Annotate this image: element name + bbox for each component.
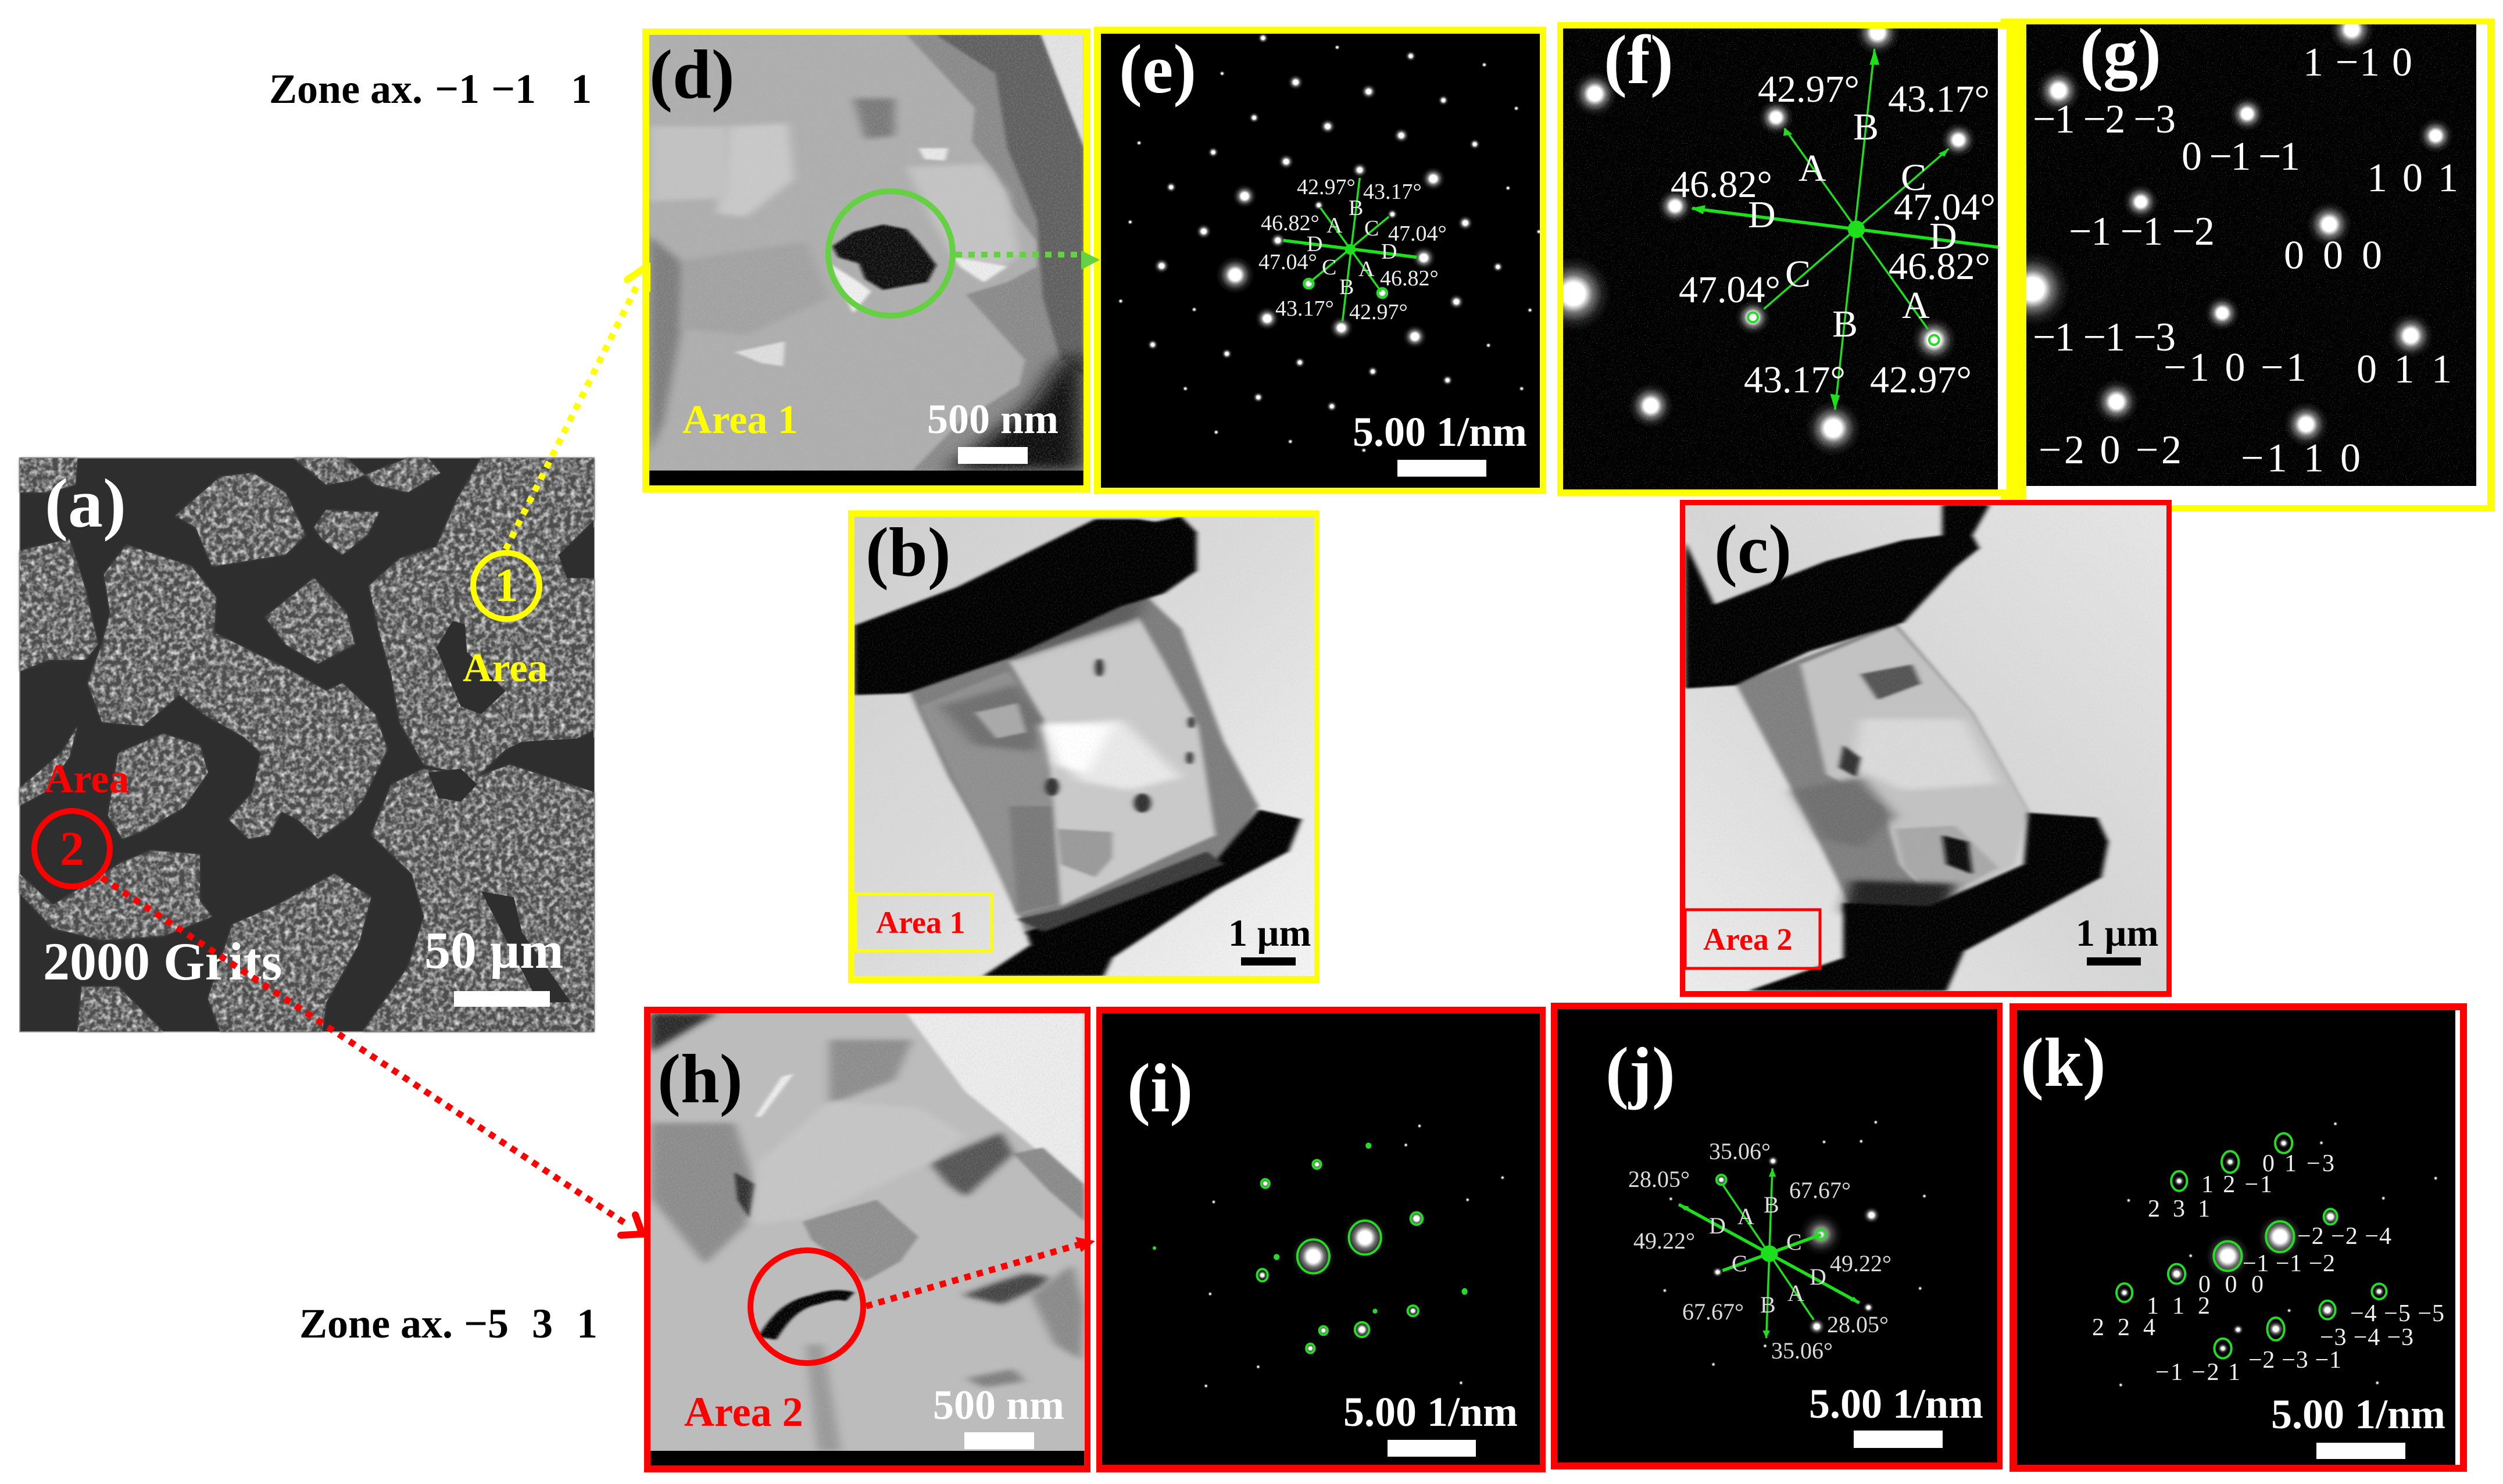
angle values: 46.82° bbox=[1261, 211, 1320, 235]
marker circle 2 bbox=[34, 811, 110, 886]
zone axis label: area 1: −1 bbox=[435, 66, 480, 112]
marker circle 2: 2 bbox=[60, 822, 84, 876]
scale bar bbox=[454, 991, 550, 1007]
Area label red: Area bbox=[44, 757, 129, 802]
angle values: 67.67° bbox=[1682, 1299, 1744, 1325]
label (b): (b) bbox=[866, 513, 951, 591]
Miller indices: −2 0 −2 bbox=[2039, 428, 2182, 473]
scale bar bbox=[2087, 957, 2141, 966]
direction letters: B bbox=[1760, 1292, 1776, 1318]
angle values: 46.82° bbox=[1671, 163, 1772, 206]
Miller indices: 2 2 4 bbox=[2092, 1314, 2155, 1341]
scale label: 5.00 1/nm bbox=[2271, 1391, 2445, 1437]
direction letters: B bbox=[1349, 196, 1363, 220]
zone axis label: area 2: 1 bbox=[577, 1300, 598, 1347]
Miller indices: −2 −3 −1 bbox=[2248, 1347, 2341, 1374]
diffraction spots bbox=[1118, 33, 1542, 453]
marker circle 1: 1 bbox=[494, 559, 519, 612]
panel d: TEM image area 1 bbox=[642, 28, 1090, 492]
scale bar bbox=[958, 447, 1028, 464]
green direction lines bbox=[1283, 178, 1417, 321]
Area 1 boxed label: Area 1 bbox=[876, 905, 965, 940]
diffraction spots and green rings bbox=[1153, 1124, 1505, 1389]
direction letters: D bbox=[1381, 239, 1397, 264]
scale label 50 µm: 50 µm bbox=[424, 922, 563, 979]
angle values: 28.05° bbox=[1628, 1166, 1690, 1192]
Area label yellow: Area bbox=[463, 646, 548, 691]
direction letters: C bbox=[1786, 1229, 1802, 1255]
zone axis label: area 2: 3 bbox=[532, 1300, 553, 1347]
angle values: 42.97° bbox=[1349, 300, 1408, 324]
label (j): (j) bbox=[1606, 1033, 1675, 1110]
label (c): (c) bbox=[1714, 510, 1792, 588]
scale label: 1 µm bbox=[2076, 912, 2159, 954]
marker circle 1 bbox=[473, 553, 539, 619]
direction letters: A bbox=[1737, 1203, 1754, 1229]
diffraction spots bbox=[1662, 1120, 1927, 1367]
arrow: green dotted from panel d to panel e bbox=[956, 251, 1100, 270]
angle values: 43.17° bbox=[1744, 359, 1846, 401]
direction letters: C bbox=[1364, 216, 1379, 241]
direction letters: A bbox=[1787, 1280, 1804, 1306]
angle values: 46.82° bbox=[1889, 245, 1990, 288]
green selected area circle bbox=[828, 191, 953, 316]
angle values: 43.17° bbox=[1275, 296, 1334, 321]
Miller indices: 0 −1 −1 bbox=[2182, 134, 2300, 179]
direction letters: A bbox=[1326, 213, 1343, 238]
green direction arrows bbox=[1679, 1168, 1860, 1338]
zone axis label: area 1: 1 bbox=[571, 66, 592, 112]
Area 2 label: Area 2 bbox=[684, 1389, 803, 1435]
scale label: 1 µm bbox=[1228, 912, 1311, 954]
Miller indices: −1 −2 −3 bbox=[2033, 97, 2176, 142]
angle values: 35.06° bbox=[1709, 1138, 1771, 1164]
angle values: 47.04° bbox=[1679, 269, 1780, 311]
angle values: 35.06° bbox=[1771, 1338, 1833, 1364]
panel k: indexed diffraction pattern with rings bbox=[2009, 1003, 2467, 1472]
green direction arrows bbox=[1691, 49, 2002, 410]
direction letters: A bbox=[1902, 284, 1930, 327]
Miller indices bbox=[2033, 40, 2458, 481]
scale bar bbox=[1388, 1440, 1476, 1457]
angle values: 28.05° bbox=[1827, 1311, 1889, 1338]
angle values: 67.67° bbox=[1789, 1177, 1851, 1203]
Miller indices: −1 −1 −3 bbox=[2033, 315, 2176, 360]
panel g: indexed diffraction pattern bbox=[1995, 7, 2495, 512]
scale label 500 nm: 500 nm bbox=[933, 1382, 1064, 1428]
panel f: magnified diffraction pattern with angles bbox=[1557, 22, 2007, 496]
direction letters: A bbox=[1358, 257, 1375, 281]
angle values: 42.97° bbox=[1297, 175, 1356, 199]
scale bar bbox=[1397, 460, 1486, 477]
direction letters: C bbox=[1785, 253, 1811, 295]
label (d): (d) bbox=[649, 35, 735, 113]
direction letters: B bbox=[1339, 275, 1354, 299]
arrow: red dotted from panel h to panel i bbox=[866, 1237, 1095, 1306]
arrow: yellow dotted from area 1 to panel d bbox=[506, 263, 646, 549]
label (f): (f) bbox=[1604, 21, 1674, 98]
angle values bbox=[1628, 1138, 1891, 1364]
Miller indices: 1 −1 0 bbox=[2303, 40, 2412, 85]
zone axis label: area 2: −5 bbox=[464, 1300, 509, 1347]
angle values: 43.17° bbox=[1363, 180, 1422, 204]
direction letters: A bbox=[1798, 147, 1826, 189]
scale label: 5.00 1/nm bbox=[1809, 1381, 1983, 1427]
Miller indices: −1 1 0 bbox=[2241, 436, 2361, 481]
direction letters: D bbox=[1709, 1213, 1726, 1239]
Miller indices bbox=[2092, 1150, 2444, 1386]
direction letters: D bbox=[1307, 232, 1322, 256]
diffraction spots bbox=[1536, 10, 1998, 489]
angle values: 42.97° bbox=[1758, 68, 1860, 110]
angle values: 47.04° bbox=[1388, 221, 1447, 246]
Miller indices: 0 1 1 bbox=[2357, 347, 2452, 392]
Miller indices: 0 0 0 bbox=[2198, 1271, 2264, 1298]
diffraction spots bbox=[1995, 7, 2476, 486]
direction letters: D bbox=[1929, 215, 1957, 258]
Area 2 boxed label bbox=[1685, 910, 1820, 968]
panel a: SEM micrograph bbox=[20, 458, 594, 1032]
Miller indices: −3 −4 −3 bbox=[2320, 1324, 2413, 1351]
label (k): (k) bbox=[2021, 1024, 2106, 1101]
Area 1 label: Area 1 bbox=[682, 398, 798, 442]
direction letters: C bbox=[1732, 1250, 1747, 1276]
angle values: 49.22° bbox=[1633, 1228, 1695, 1254]
Miller indices: 1 2 −1 bbox=[2201, 1171, 2272, 1198]
zone axis label: area 1: Zone ax. bbox=[269, 66, 423, 112]
angle values: 46.82° bbox=[1380, 266, 1439, 291]
Area 2 boxed label: Area 2 bbox=[1703, 922, 1792, 957]
diffraction spots and green rings bbox=[2116, 1121, 2438, 1388]
angle values: 47.04° bbox=[1258, 250, 1317, 274]
scale bar bbox=[964, 1432, 1034, 1449]
scale bar bbox=[1854, 1431, 1943, 1448]
Miller indices: −1 −2 1 bbox=[2155, 1359, 2240, 1386]
Miller indices: 1 1 2 bbox=[2147, 1293, 2210, 1319]
direction letters: D bbox=[1748, 194, 1776, 236]
scale bar bbox=[2316, 1443, 2405, 1459]
angle values: 47.04° bbox=[1894, 186, 1996, 228]
direction letters: B bbox=[1764, 1192, 1779, 1218]
Miller indices: −1 −1 −2 bbox=[2069, 209, 2215, 254]
panel c: TEM lamella area 2 bbox=[1680, 500, 2172, 997]
scale bar bbox=[1241, 957, 1296, 966]
direction letters: C bbox=[1901, 156, 1926, 199]
Miller indices: −2 −2 −4 bbox=[2297, 1223, 2391, 1250]
zone axis label: area 2: Zone ax. bbox=[299, 1300, 453, 1347]
direction letters bbox=[1709, 1192, 1826, 1318]
Miller indices: 1 0 1 bbox=[2367, 156, 2458, 201]
Miller indices: 0 1 −3 bbox=[2262, 1150, 2334, 1177]
angle values: 49.22° bbox=[1830, 1250, 1891, 1276]
panel j: diffraction pattern with angles bbox=[1551, 1003, 2003, 1469]
label (e): (e) bbox=[1119, 30, 1196, 108]
label (a): (a) bbox=[45, 464, 126, 542]
Miller indices: 2 3 1 bbox=[2148, 1196, 2210, 1222]
scale label 500 nm: 500 nm bbox=[927, 396, 1059, 442]
label (g): (g) bbox=[2080, 14, 2161, 92]
label (h): (h) bbox=[657, 1040, 743, 1117]
direction letters: C bbox=[1322, 255, 1336, 280]
scale label: 5.00 1/nm bbox=[1353, 409, 1527, 455]
arrow: red dotted from area 2 to panel h bbox=[102, 878, 642, 1235]
grit label: 2000 Grits bbox=[43, 932, 282, 991]
Miller indices: −4 −5 −5 bbox=[2350, 1300, 2444, 1327]
panel h: TEM image area 2 bbox=[644, 1007, 1090, 1472]
panel b: TEM lamella area 1 bbox=[848, 510, 1320, 983]
scale label: 5.00 1/nm bbox=[1343, 1389, 1518, 1435]
direction letters bbox=[1307, 196, 1397, 299]
red selected area circle bbox=[750, 1250, 863, 1363]
angle values: 43.17° bbox=[1888, 78, 1990, 120]
label (i): (i) bbox=[1127, 1049, 1193, 1127]
Area 1 boxed label bbox=[856, 894, 992, 951]
Miller indices: −1 0 −1 bbox=[2164, 345, 2307, 390]
panel e: diffraction pattern with angles bbox=[1094, 27, 1546, 494]
zone axis label: area 1: −1 bbox=[491, 66, 536, 112]
panel i: diffraction pattern with rings bbox=[1096, 1007, 1546, 1472]
Miller indices: −1 −1 −2 bbox=[2243, 1250, 2335, 1277]
direction letters: B bbox=[1853, 106, 1879, 148]
angle values bbox=[1671, 68, 1996, 401]
Miller indices: 0 0 0 bbox=[2284, 233, 2382, 278]
angle values: 42.97° bbox=[1870, 359, 1972, 401]
angle values bbox=[1258, 175, 1447, 324]
direction letters: D bbox=[1810, 1264, 1826, 1290]
direction letters: B bbox=[1832, 303, 1858, 345]
direction letters bbox=[1748, 106, 1957, 345]
